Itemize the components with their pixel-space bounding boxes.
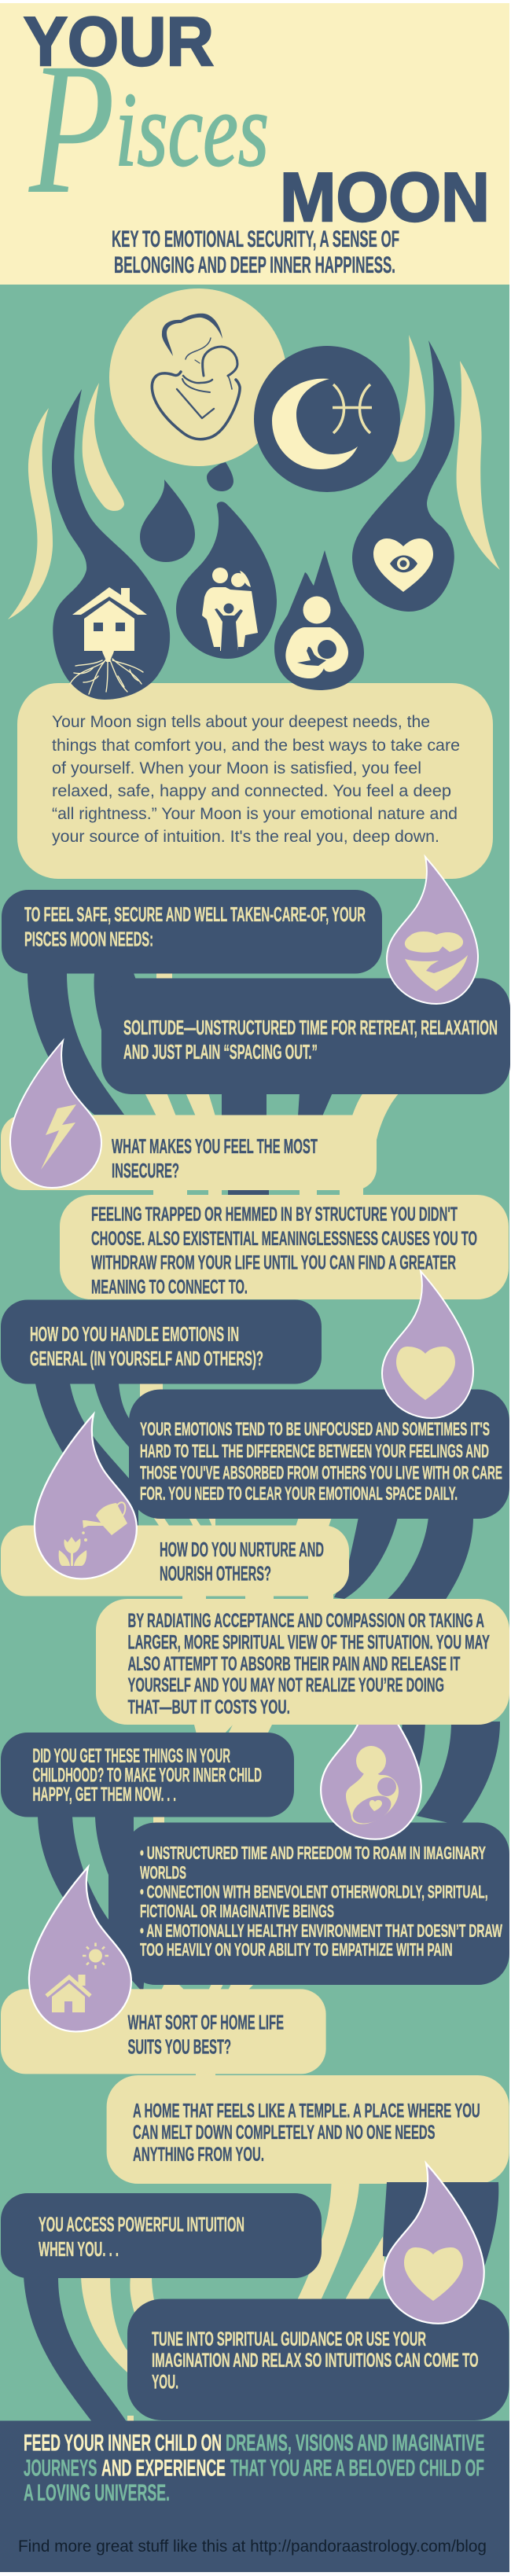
panel: needs: PISCES MOON NEEDS: — [24, 928, 153, 951]
panel: childhood question: DID YOU GET THESE THINGS IN YOUR — [33, 1745, 230, 1767]
panel: nurture question: HOW DO YOU NURTURE AND — [160, 1538, 324, 1561]
title: moon: MOON — [280, 158, 490, 236]
panel: a home like a temple — [107, 2075, 509, 2184]
panel: unstructured list: WORLDS — [140, 1862, 186, 1883]
streams: right arcs — [193, 1722, 500, 1825]
intro text: Your Moon sign tells about your deepest needs, the — [52, 713, 430, 731]
panel: childhood question: CHILDHOOD? TO MAKE YOUR INNER CHILD — [33, 1765, 262, 1787]
streams: childhood — [38, 1815, 256, 1993]
panel: what makes you insecure — [1, 1115, 377, 1190]
panel: unstructured list — [124, 1822, 509, 1985]
panel: solitude: AND JUST PLAIN “SPACING OUT.” — [123, 1040, 318, 1064]
drop: nursing mother — [274, 550, 364, 690]
panel: unstructured list: FICTIONAL OR IMAGINATIVE BEINGS — [140, 1901, 334, 1921]
footer message: JOURNEYS — [24, 2456, 97, 2482]
intro text: your source of intuition. It's the real you, deep down. — [52, 828, 439, 846]
drop: small under circle — [207, 462, 233, 491]
panel: what makes you insecure: WHAT MAKES YOU FEEL THE MOST — [112, 1134, 318, 1158]
footer credit: Find more great stuff like this at http://pandoraastrology.com/blog — [18, 2537, 487, 2556]
drop: large heart — [384, 2163, 484, 2324]
panel: solitude — [101, 978, 510, 1094]
panel: trapped: MEANING TO CONNECT TO. — [91, 1277, 248, 1299]
flame: far left cream — [8, 408, 53, 619]
panel: trapped — [60, 1195, 509, 1299]
footer message: FEED YOUR INNER CHILD ON — [24, 2430, 222, 2456]
panel: tune into — [127, 2299, 509, 2420]
panel: home life question — [1, 1989, 326, 2074]
drop: pregnant figure — [321, 1678, 421, 1839]
panel: you access: YOU ACCESS POWERFUL INTUITION — [39, 2212, 244, 2236]
panel: childhood question — [1, 1733, 294, 1817]
subtitle — [112, 226, 399, 278]
panel: radiating — [96, 1599, 509, 1725]
intro text: things that comfort you, and the best ways to take care — [52, 737, 460, 755]
intro text — [52, 713, 460, 846]
intro text: relaxed, safe, happy and connected. You feel a deep — [52, 782, 451, 800]
circle: mother and child — [109, 288, 287, 466]
footer message: A LOVING UNIVERSE. — [24, 2480, 170, 2506]
flame: left cream — [83, 383, 124, 511]
panel: nurture question: NOURISH OTHERS? — [160, 1561, 271, 1585]
streams: insecure to trapped — [153, 1189, 363, 1196]
panel: you access — [1, 2193, 322, 2278]
drop: heart with eye — [352, 340, 454, 612]
illustration: flames and drops — [8, 288, 500, 700]
panel: a home like a temple: ANYTHING FROM YOU. — [133, 2144, 264, 2166]
title: your: YOUR — [24, 2, 214, 80]
intro text: of yourself. When your Moon is satisfied, you feel — [52, 759, 421, 777]
flame: far right cream — [457, 361, 500, 570]
drop: house with roots — [52, 389, 170, 700]
drop: blank — [140, 480, 195, 562]
streams: intuition — [24, 2182, 498, 2423]
intro panel — [17, 683, 493, 879]
footer message — [24, 2430, 484, 2506]
streams: needs to solitude — [28, 972, 399, 1140]
footer message: AND EXPERIENCE — [101, 2456, 226, 2482]
panel: home life question: WHAT SORT OF HOME LIFE — [127, 2011, 284, 2034]
drop: family — [176, 502, 277, 659]
footer panel — [0, 2421, 509, 2572]
panel: nurture question — [1, 1525, 349, 1596]
drop: house and sun — [29, 1867, 131, 2031]
panel: your emotions — [129, 1390, 509, 1519]
drop: watering can — [35, 1414, 137, 1578]
drop: hug heart — [387, 857, 478, 1004]
panel: home life question: SUITS YOU BEST? — [127, 2034, 231, 2058]
panel: tune into: YOU. — [152, 2371, 178, 2393]
panel: radiating: THAT—BUT IT COSTS YOU. — [127, 1696, 290, 1718]
streams: nurture to radiating — [182, 1594, 333, 1600]
panel: childhood question: HAPPY, GET THEM NOW. . . — [33, 1784, 176, 1806]
title: pisces: isces — [115, 72, 269, 189]
drop: heart — [382, 1271, 473, 1418]
panel: needs — [2, 890, 382, 973]
circle: moon and pisces glyph — [254, 346, 400, 492]
drop: lightning — [10, 1041, 101, 1188]
panel: handle emotions question: GENERAL (IN YOURSELF AND OTHERS)? — [30, 1347, 263, 1370]
panel: you access: WHEN YOU. . . — [39, 2237, 119, 2261]
panel: handle emotions question — [1, 1300, 322, 1384]
flame: right cream — [389, 335, 425, 462]
intro text: “all rightness.” Your Moon is your emotional nature and — [52, 805, 458, 823]
panel: handle emotions question: HOW DO YOU HANDLE EMOTIONS IN — [30, 1322, 239, 1346]
title: pisces: P — [28, 24, 115, 233]
streams: emotions — [35, 1382, 473, 1600]
header panel — [0, 2, 509, 285]
panel: what makes you insecure: INSECURE? — [112, 1159, 179, 1182]
